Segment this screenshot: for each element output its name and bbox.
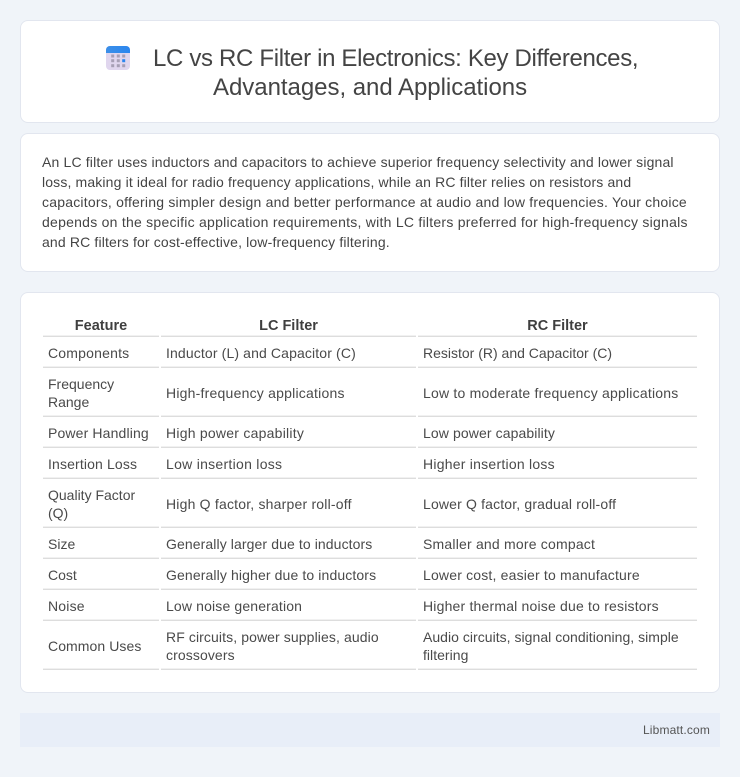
row: Quality Factor: (Q) bbox=[48, 505, 68, 521]
cell: LC uses: RF circuits, power supplies, audio bbox=[166, 629, 379, 645]
row: Frequency Range bbox=[48, 376, 114, 410]
row: Common Uses: Common Uses bbox=[48, 638, 141, 654]
row: Size: Size bbox=[48, 536, 75, 552]
cell: RC frequency: Low to moderate frequency applications bbox=[423, 385, 678, 401]
row: Insertion Loss: Insertion Loss bbox=[48, 456, 137, 472]
summary text: capacitors, offering simpler design and better performance at audio and low frequencies. Your choice bbox=[42, 194, 687, 210]
cell: RC components: Resistor (R) and Capacitor (C) bbox=[423, 345, 612, 361]
cell: RC uses bbox=[423, 629, 679, 663]
cell: RC uses: filtering bbox=[423, 647, 468, 663]
cell: LC quality: High Q factor, sharper roll-off bbox=[166, 496, 352, 512]
panel: comparison table bbox=[20, 292, 720, 693]
title: LC vs RC Filter in Electronics: Key Differences, bbox=[153, 45, 638, 72]
cell: LC cost: Generally higher due to inductors bbox=[166, 567, 376, 583]
cell: RC cost: Lower cost, easier to manufacture bbox=[423, 567, 640, 583]
table header: RC Filter: RC Filter bbox=[527, 318, 588, 334]
row: Quality Factor bbox=[48, 487, 135, 521]
cell: RC power: Low power capability bbox=[423, 425, 555, 441]
table header: Feature: Feature bbox=[75, 318, 127, 334]
row: Frequency Range: Range bbox=[48, 394, 89, 410]
row: Noise: Noise bbox=[48, 598, 85, 614]
cell: RC noise: Higher thermal noise due to resistors bbox=[423, 598, 659, 614]
icon: calendar bbox=[106, 46, 130, 70]
cell: LC frequency: High-frequency applications bbox=[166, 385, 345, 401]
panel: title header bbox=[20, 20, 720, 123]
panel: summary bbox=[20, 133, 720, 272]
cell: LC uses bbox=[166, 629, 379, 663]
footer text: Libmatt.com bbox=[643, 723, 710, 737]
summary text: An LC filter uses inductors and capacitors to achieve superior frequency selectivity and lower signal bbox=[42, 154, 674, 170]
row: Cost: Cost bbox=[48, 567, 77, 583]
summary text: depends on the specific application requirements, with LC filters preferred for high-frequency signals bbox=[42, 214, 688, 230]
cell: RC quality: Lower Q factor, gradual roll-off bbox=[423, 496, 616, 512]
row: Quality Factor: Quality Factor bbox=[48, 487, 135, 503]
row: Components: Components bbox=[48, 345, 129, 361]
summary text: and RC filters for cost-effective, low-frequency filtering. bbox=[42, 234, 390, 250]
cell: LC components: Inductor (L) and Capacitor (C) bbox=[166, 345, 356, 361]
cell: RC insertion loss: Higher insertion loss bbox=[423, 456, 555, 472]
cell: LC noise: Low noise generation bbox=[166, 598, 302, 614]
row: Frequency Range: Frequency bbox=[48, 376, 114, 392]
summary text: loss, making it ideal for radio frequency applications, while an RC filter relies on resistors and bbox=[42, 174, 631, 190]
row: Power Handling: Power Handling bbox=[48, 425, 149, 441]
title second line: Advantages, and Applications bbox=[213, 74, 527, 101]
summary text bbox=[42, 154, 688, 250]
cell: LC insertion loss: Low insertion loss bbox=[166, 456, 282, 472]
cell: LC size: Generally larger due to inductors bbox=[166, 536, 372, 552]
table header: LC Filter: LC Filter bbox=[259, 318, 318, 334]
cell: LC power: High power capability bbox=[166, 425, 304, 441]
cell: RC size: Smaller and more compact bbox=[423, 536, 595, 552]
cell: RC uses: Audio circuits, signal conditioning, simple bbox=[423, 629, 679, 645]
footer bar bbox=[20, 713, 720, 747]
cell: LC uses: crossovers bbox=[166, 647, 235, 663]
